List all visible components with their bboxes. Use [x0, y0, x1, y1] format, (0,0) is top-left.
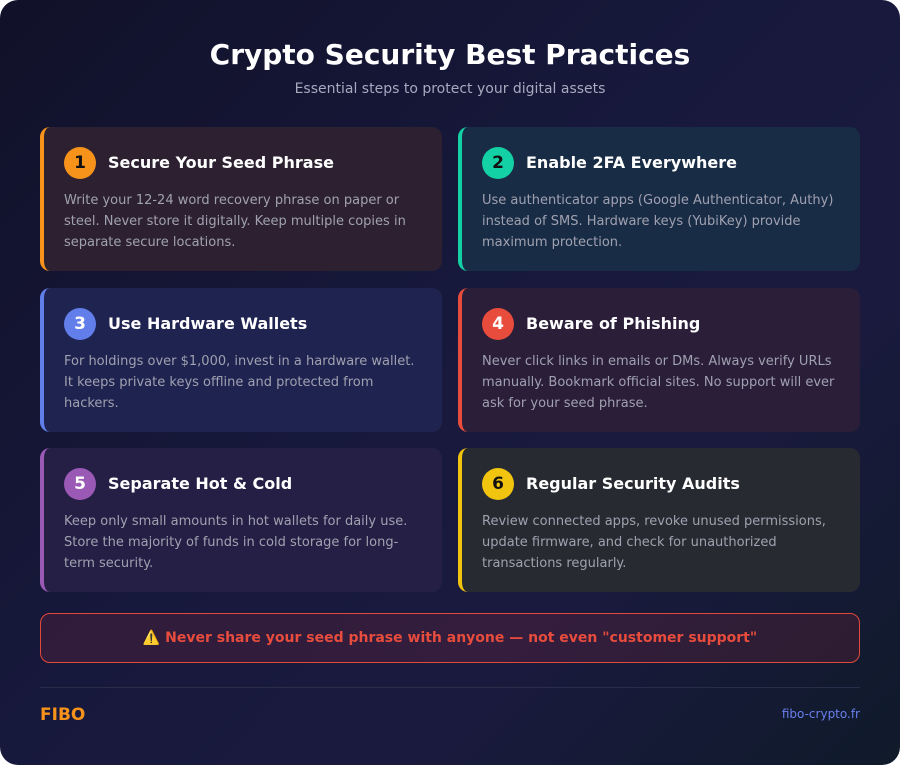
icon: number 6 — [482, 468, 514, 500]
icon: number 4: 4 — [492, 314, 504, 334]
heading: Regular Security Audits — [526, 474, 740, 493]
heading: Secure Your Seed Phrase — [108, 153, 334, 172]
panel: 6 audits — [458, 448, 860, 592]
text: Write your 12-24 word recovery phrase on paper or steel. Never store it digitally. Keep multiple copies in separate secure locations. — [64, 193, 406, 250]
icon: number 6: 6 — [492, 474, 504, 494]
text: For holdings over $1,000, invest in a hardware wallet. It keeps private keys offline and protected from hackers. — [64, 354, 414, 411]
icon: number 2: 2 — [492, 153, 504, 173]
icon: number 3 — [64, 308, 96, 340]
callout: warning — [40, 613, 860, 663]
text: Use authenticator apps (Google Authenticator, Authy) instead of SMS. Hardware keys (YubiKey) provide maximum protection. — [482, 193, 833, 250]
text: Keep only small amounts in hot wallets for daily use. Store the majority of funds in cold storage for long-term security. — [64, 514, 407, 571]
icon: number 5 — [64, 468, 96, 500]
heading: Separate Hot & Cold — [108, 474, 292, 493]
footer link: fibo-crypto.fr — [782, 707, 860, 721]
icon: number 5: 5 — [74, 474, 86, 494]
callout: warning: ⚠️ Never share your seed phrase with anyone — not even "customer support" — [143, 630, 757, 646]
icon: number 1: 1 — [74, 153, 86, 173]
heading: Use Hardware Wallets — [108, 314, 307, 333]
icon: number 2 — [482, 147, 514, 179]
heading: Enable 2FA Everywhere — [526, 153, 737, 172]
icon: number 4 — [482, 308, 514, 340]
icon: number 3: 3 — [74, 314, 86, 334]
panel: 2 2FA — [458, 127, 860, 271]
icon: number 1 — [64, 147, 96, 179]
panel: 5 hot & cold — [40, 448, 442, 592]
panel: 3 hardware wallets — [40, 288, 442, 432]
text: Review connected apps, revoke unused permissions, update firmware, and check for unauthorized transactions regularly. — [482, 514, 826, 571]
panel: 1 seed phrase — [40, 127, 442, 271]
heading: Beware of Phishing — [526, 314, 700, 333]
subtitle: Essential steps to protect your digital assets — [295, 81, 605, 97]
title: Crypto Security Best Practices — [210, 38, 690, 71]
text: Never click links in emails or DMs. Always verify URLs manually. Bookmark official sites. No support will ever ask for your seed phrase. — [482, 354, 834, 411]
panel: 4 phishing — [458, 288, 860, 432]
footer brand: FIBO — [40, 705, 85, 725]
